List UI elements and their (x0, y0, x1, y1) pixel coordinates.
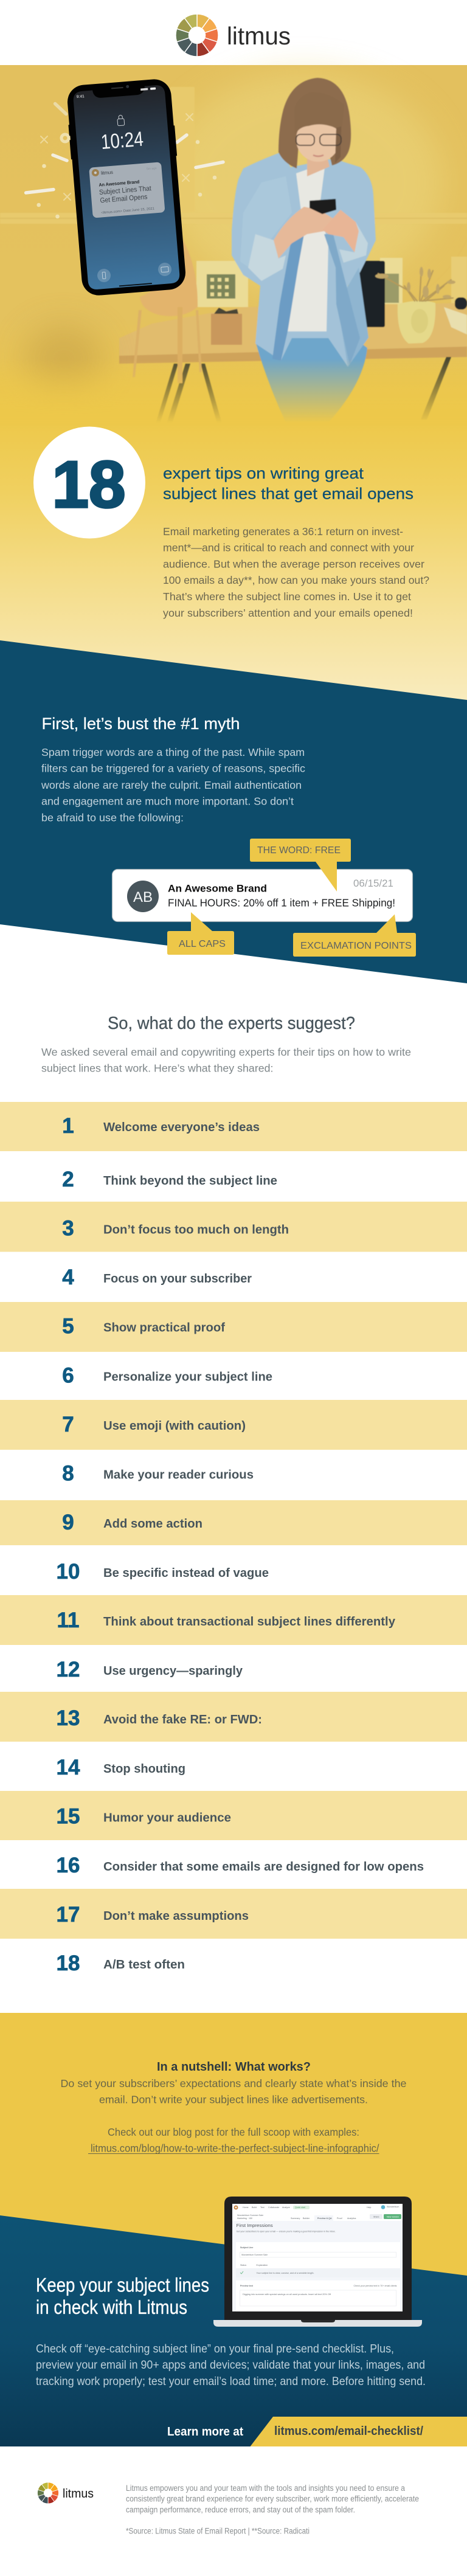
woman: jacket (232, 152, 376, 367)
woman: hair back (278, 78, 351, 168)
woman: jacket placket (272, 234, 304, 361)
laptop screen UI: Summary (291, 2217, 300, 2220)
laptop screen UI: Wonderblum Summer Sale (241, 2254, 268, 2256)
intro paragraph: 100 emails a day**, how can you make yours stand out? (163, 574, 429, 586)
laptop screen UI: Status (240, 2264, 246, 2266)
laptop screen UI: First Impressions (237, 2223, 273, 2228)
myth paragraph: and engagement are much more important. So don’t (41, 795, 294, 808)
laptop screen UI: Proof (337, 2217, 342, 2220)
intro paragraph: audience. But when the average person receives over (163, 558, 424, 570)
notification card: Get Email Opens (100, 193, 148, 204)
intro paragraph: your subscribers’ attention and your emails opened! (163, 607, 413, 619)
laptop screen UI: Explanation (257, 2264, 268, 2266)
tip 17: Don’t make assumptions (103, 1909, 249, 1923)
footer text: consistently great brand experience for every subscriber, work more efficiently, accelerate (126, 2495, 419, 2504)
laptop screen UI: Build (252, 2206, 257, 2209)
laptop screen UI: Wonderblum Summer Sale (237, 2214, 263, 2217)
tip 16 (57, 1854, 424, 1877)
phone sparkle rays (26, 103, 223, 218)
laptop screen UI: Share (373, 2216, 379, 2218)
tip 14: 14 (57, 1756, 80, 1779)
woman: t-shirt (288, 163, 328, 331)
tip 1: Welcome everyone’s ideas (103, 1121, 260, 1134)
laptop screen UI (232, 2204, 403, 2311)
tip 5: 5 (62, 1315, 74, 1338)
intro paragraph: Email marketing generates a 36:1 return on invest- (163, 525, 403, 538)
inbox card example (112, 870, 412, 922)
tip 7: 7 (62, 1413, 74, 1436)
laptop behind (358, 261, 385, 327)
callout: the word free: THE WORD: FREE (257, 845, 341, 856)
woman: phone (310, 199, 336, 214)
intro paragraph: That’s where the subject line comes in. Use it to get (163, 590, 411, 603)
intro panel background (0, 426, 467, 705)
laptop screen UI: Digging into summer with special savings on all used products. Insert alt text 20% Off (243, 2293, 331, 2296)
footer wordmark: litmus (63, 2487, 94, 2501)
blog link (88, 2126, 379, 2154)
tip 1 (0, 1102, 467, 1151)
woman: fringe (294, 92, 344, 135)
hero photo: woman reading phone at desk (0, 65, 467, 427)
tip 10: 10 (57, 1560, 80, 1584)
laptop screen UI: Help (367, 2206, 371, 2209)
tip 4: 4 (62, 1265, 74, 1289)
checklist paragraph: Check off “eye-catching subject line” on your final pre-send checklist. Plus, (36, 2342, 394, 2356)
tip 6: Personalize your subject line (103, 1371, 272, 1384)
footer text: *Source: Litmus State of Email Report | **Source: Radicati (126, 2527, 310, 2536)
tip 13: Avoid the fake RE: or FWD: (103, 1713, 262, 1726)
icon: Litmus colour wheel (173, 11, 221, 60)
nutshell heading: In a nutshell: What works? (157, 2060, 311, 2074)
tip 3: Don’t focus too much on length (103, 1224, 289, 1237)
laptop screen UI: Analytics (347, 2217, 356, 2220)
tip 15: 15 (57, 1805, 80, 1828)
woman: face (296, 117, 340, 162)
lock screen time: 10:24 (100, 128, 144, 154)
tip 17: 17 (57, 1903, 80, 1927)
callout: the word free (250, 839, 351, 892)
tip 12: 12 (57, 1658, 80, 1681)
tip 2: Think beyond the subject line (103, 1174, 277, 1188)
myth paragraph (41, 746, 305, 823)
table legs (155, 364, 178, 426)
tip 18: 18 (57, 1951, 80, 1975)
notification card: litmus (101, 170, 113, 176)
tip 1: 1 (62, 1114, 74, 1138)
experts heading: So, what do the experts suggest? (108, 1014, 355, 1033)
sender name: An Awesome Brand (168, 883, 267, 894)
tip 10 (57, 1560, 269, 1584)
phone mockup (65, 78, 188, 297)
checklist paragraph (36, 2342, 426, 2388)
icon: small colour wheel (36, 2481, 60, 2505)
tip 12: Use urgency—sparingly (103, 1664, 243, 1678)
nutshell paragraph (61, 2077, 407, 2105)
tip 4 (62, 1265, 252, 1289)
woman: neck (307, 157, 330, 176)
nutshell paragraph: email. Don’t write your subject lines like advertisements. (99, 2093, 368, 2105)
panel: nutshell yellow section (0, 2013, 467, 2280)
nutshell paragraph: Do set your subscribers’ expectations and clearly state what’s inside the (61, 2077, 407, 2090)
lamp (140, 239, 198, 316)
tip 16: Consider that some emails are designed for low opens (103, 1860, 424, 1874)
laptop lid (224, 2197, 412, 2320)
panel: myth section diagonal band (0, 640, 467, 983)
date: 06/15/21 (353, 878, 393, 889)
myth paragraph: be afraid to use the following: (41, 811, 184, 823)
tip 18 (57, 1951, 185, 1975)
call to action band: litmus.com/email-checklist/ (274, 2425, 423, 2438)
laptop screen UI: Preview & QA (317, 2217, 332, 2220)
blog link: litmus.com/blog/how-to-write-the-perfect-subject-line-infographic/ (91, 2142, 379, 2154)
laptop screen UI: Quick start (295, 2206, 305, 2209)
tip 9: 9 (62, 1511, 74, 1534)
tip 11 (0, 1595, 467, 1645)
panel: checklist blue section (0, 2215, 467, 2446)
laptop screen UI: Home (243, 2206, 249, 2209)
vase (398, 300, 435, 344)
tip 13: 13 (57, 1706, 80, 1730)
footer text: Litmus empowers you and your team with the tools and insights you need to ensure a (126, 2484, 405, 2493)
checklist paragraph: preview your email in 90+ apps and devices; validate that your links, images, and (36, 2358, 425, 2372)
experts paragraph (41, 1046, 411, 1074)
tip 4: Focus on your subscriber (103, 1272, 252, 1286)
myth paragraph: words alone are rarely the culprit. Email authentication (41, 779, 302, 791)
tip 15: Humor your audience (103, 1811, 231, 1824)
home bar (119, 283, 152, 286)
laptop screen UI: Marketing · 150 (237, 2217, 252, 2220)
notification card: Subject Lines That (99, 185, 152, 196)
myth heading: First, let’s bust the #1 myth (41, 715, 240, 733)
header: Litmus logo (173, 11, 291, 60)
intro paragraph: ment*—and is critical to reach and connect with your (163, 542, 414, 554)
circle badge with number 18 (33, 427, 145, 539)
tips list (0, 1102, 467, 1975)
notification card: An Awesome Brand (99, 179, 140, 188)
tip 7: Use emoji (with caution) (103, 1419, 246, 1433)
call to action band (167, 2417, 467, 2446)
lock icon (117, 115, 125, 126)
status bar: 9:41 (77, 94, 85, 99)
tip 6 (62, 1363, 272, 1388)
laptop mockup (213, 2197, 422, 2327)
laptop screen UI: Test (260, 2206, 265, 2209)
left foreground shadow (24, 325, 103, 392)
laptop screen UI: Wonderblum (387, 2206, 399, 2208)
checklist heading (36, 2274, 209, 2318)
laptop screen UI: Your subject line is clear, concise, and of a sensible length. (257, 2272, 314, 2274)
myth paragraph: Spam trigger words are a thing of the past. While spam (41, 746, 305, 758)
tip 7 (0, 1400, 467, 1450)
laptop screen UI: Preview text (240, 2285, 254, 2287)
tip 5 (0, 1302, 467, 1352)
avatar (127, 881, 159, 912)
subject line: FINAL HOURS: 20% off 1 item + FREE Shipping! (168, 897, 395, 909)
phone body (66, 78, 187, 297)
laptop screen UI: New version (387, 2216, 399, 2218)
laptop screen UI: Subject Line (240, 2246, 253, 2249)
table (119, 303, 467, 364)
intro paragraph (163, 525, 429, 619)
woman: jeans (256, 328, 367, 423)
woman: cuffs (248, 234, 286, 281)
tip 15 (0, 1791, 467, 1840)
notification card (89, 162, 165, 218)
tip 11: Think about transactional subject lines differently (103, 1615, 396, 1629)
tip 6: 6 (62, 1363, 74, 1388)
tip 17 (0, 1889, 467, 1939)
laptop screen UI: Builder (303, 2217, 310, 2220)
notification card: 5m ago (147, 167, 157, 171)
wall background (0, 65, 467, 426)
tip 14: Stop shouting (103, 1762, 185, 1776)
tip 13 (0, 1692, 467, 1742)
tip 14 (57, 1756, 185, 1779)
laptop screen UI: Collaborate (268, 2206, 279, 2209)
tip 2: 2 (62, 1168, 74, 1191)
experts paragraph: subject lines that work. Here’s what they shared: (41, 1062, 273, 1074)
tip 10: Be specific instead of vague (103, 1567, 269, 1580)
flashlight and camera buttons (97, 268, 111, 283)
tip 18: A/B test often (103, 1958, 185, 1972)
laptop screen UI: Get your subscribers to open your email — ensure you’re making a good first impression in the inbox. (237, 2231, 336, 2233)
tip 8 (62, 1462, 254, 1486)
small box (211, 314, 242, 345)
fade to yellow (0, 359, 467, 427)
footer text (126, 2484, 419, 2536)
books and headphones (444, 307, 467, 334)
checklist paragraph: tracking work properly; test your email’s load time; and more. Before hitting send. (36, 2375, 426, 2388)
callout: exclamation points: EXCLAMATION POINTS (300, 941, 412, 951)
tip 8: 8 (62, 1462, 74, 1486)
laptop screen UI: Analyze (282, 2206, 290, 2209)
tip 9: Add some action (103, 1517, 202, 1531)
tip 8: Make your reader curious (103, 1469, 254, 1482)
blog link: Check out our blog post for the full scoop with examples: (108, 2126, 359, 2138)
tip 16: 16 (57, 1854, 80, 1877)
tip 2 (62, 1168, 277, 1191)
callout: exclamation points (293, 915, 416, 957)
logo wordmark: litmus (227, 22, 291, 50)
radiator panel (196, 261, 248, 307)
dried plant (378, 268, 453, 301)
tip 9 (0, 1500, 467, 1545)
laptop screen UI: Check your preview text in 70+ email clients (354, 2285, 397, 2287)
tip 3 (0, 1202, 467, 1252)
woman: hands (274, 207, 336, 258)
footer text: campaign performance, reduce errors, and stay out of the spam folder. (126, 2505, 355, 2514)
checklist heading: in check with Litmus (36, 2296, 187, 2318)
tip 5: Show practical proof (103, 1321, 225, 1335)
avatar: AB (133, 889, 153, 905)
footer logo (36, 2481, 94, 2505)
intro heading: expert tips on writing great (163, 464, 364, 482)
notification card: <litmus.com> Date:June 15, 2021 (101, 207, 154, 215)
circle badge with number 18: 18 (52, 448, 125, 522)
tip 3: 3 (62, 1216, 74, 1241)
tip 11: 11 (57, 1608, 79, 1632)
tip 12 (57, 1658, 243, 1681)
phone screen (73, 85, 180, 290)
call to action band: Learn more at (167, 2425, 243, 2439)
experts paragraph: We asked several email and copywriting experts for their tips on how to write (41, 1046, 411, 1058)
intro heading (163, 464, 413, 502)
woman: glasses (296, 134, 341, 145)
myth paragraph: filters can be triggered for a variety of reasons, specific (41, 763, 305, 775)
laptop base (213, 2320, 422, 2327)
callout: all caps (167, 912, 234, 955)
callout: all caps: ALL CAPS (179, 939, 226, 949)
checklist heading: Keep your subject lines (36, 2274, 209, 2296)
intro heading: subject lines that get email opens (163, 484, 413, 502)
